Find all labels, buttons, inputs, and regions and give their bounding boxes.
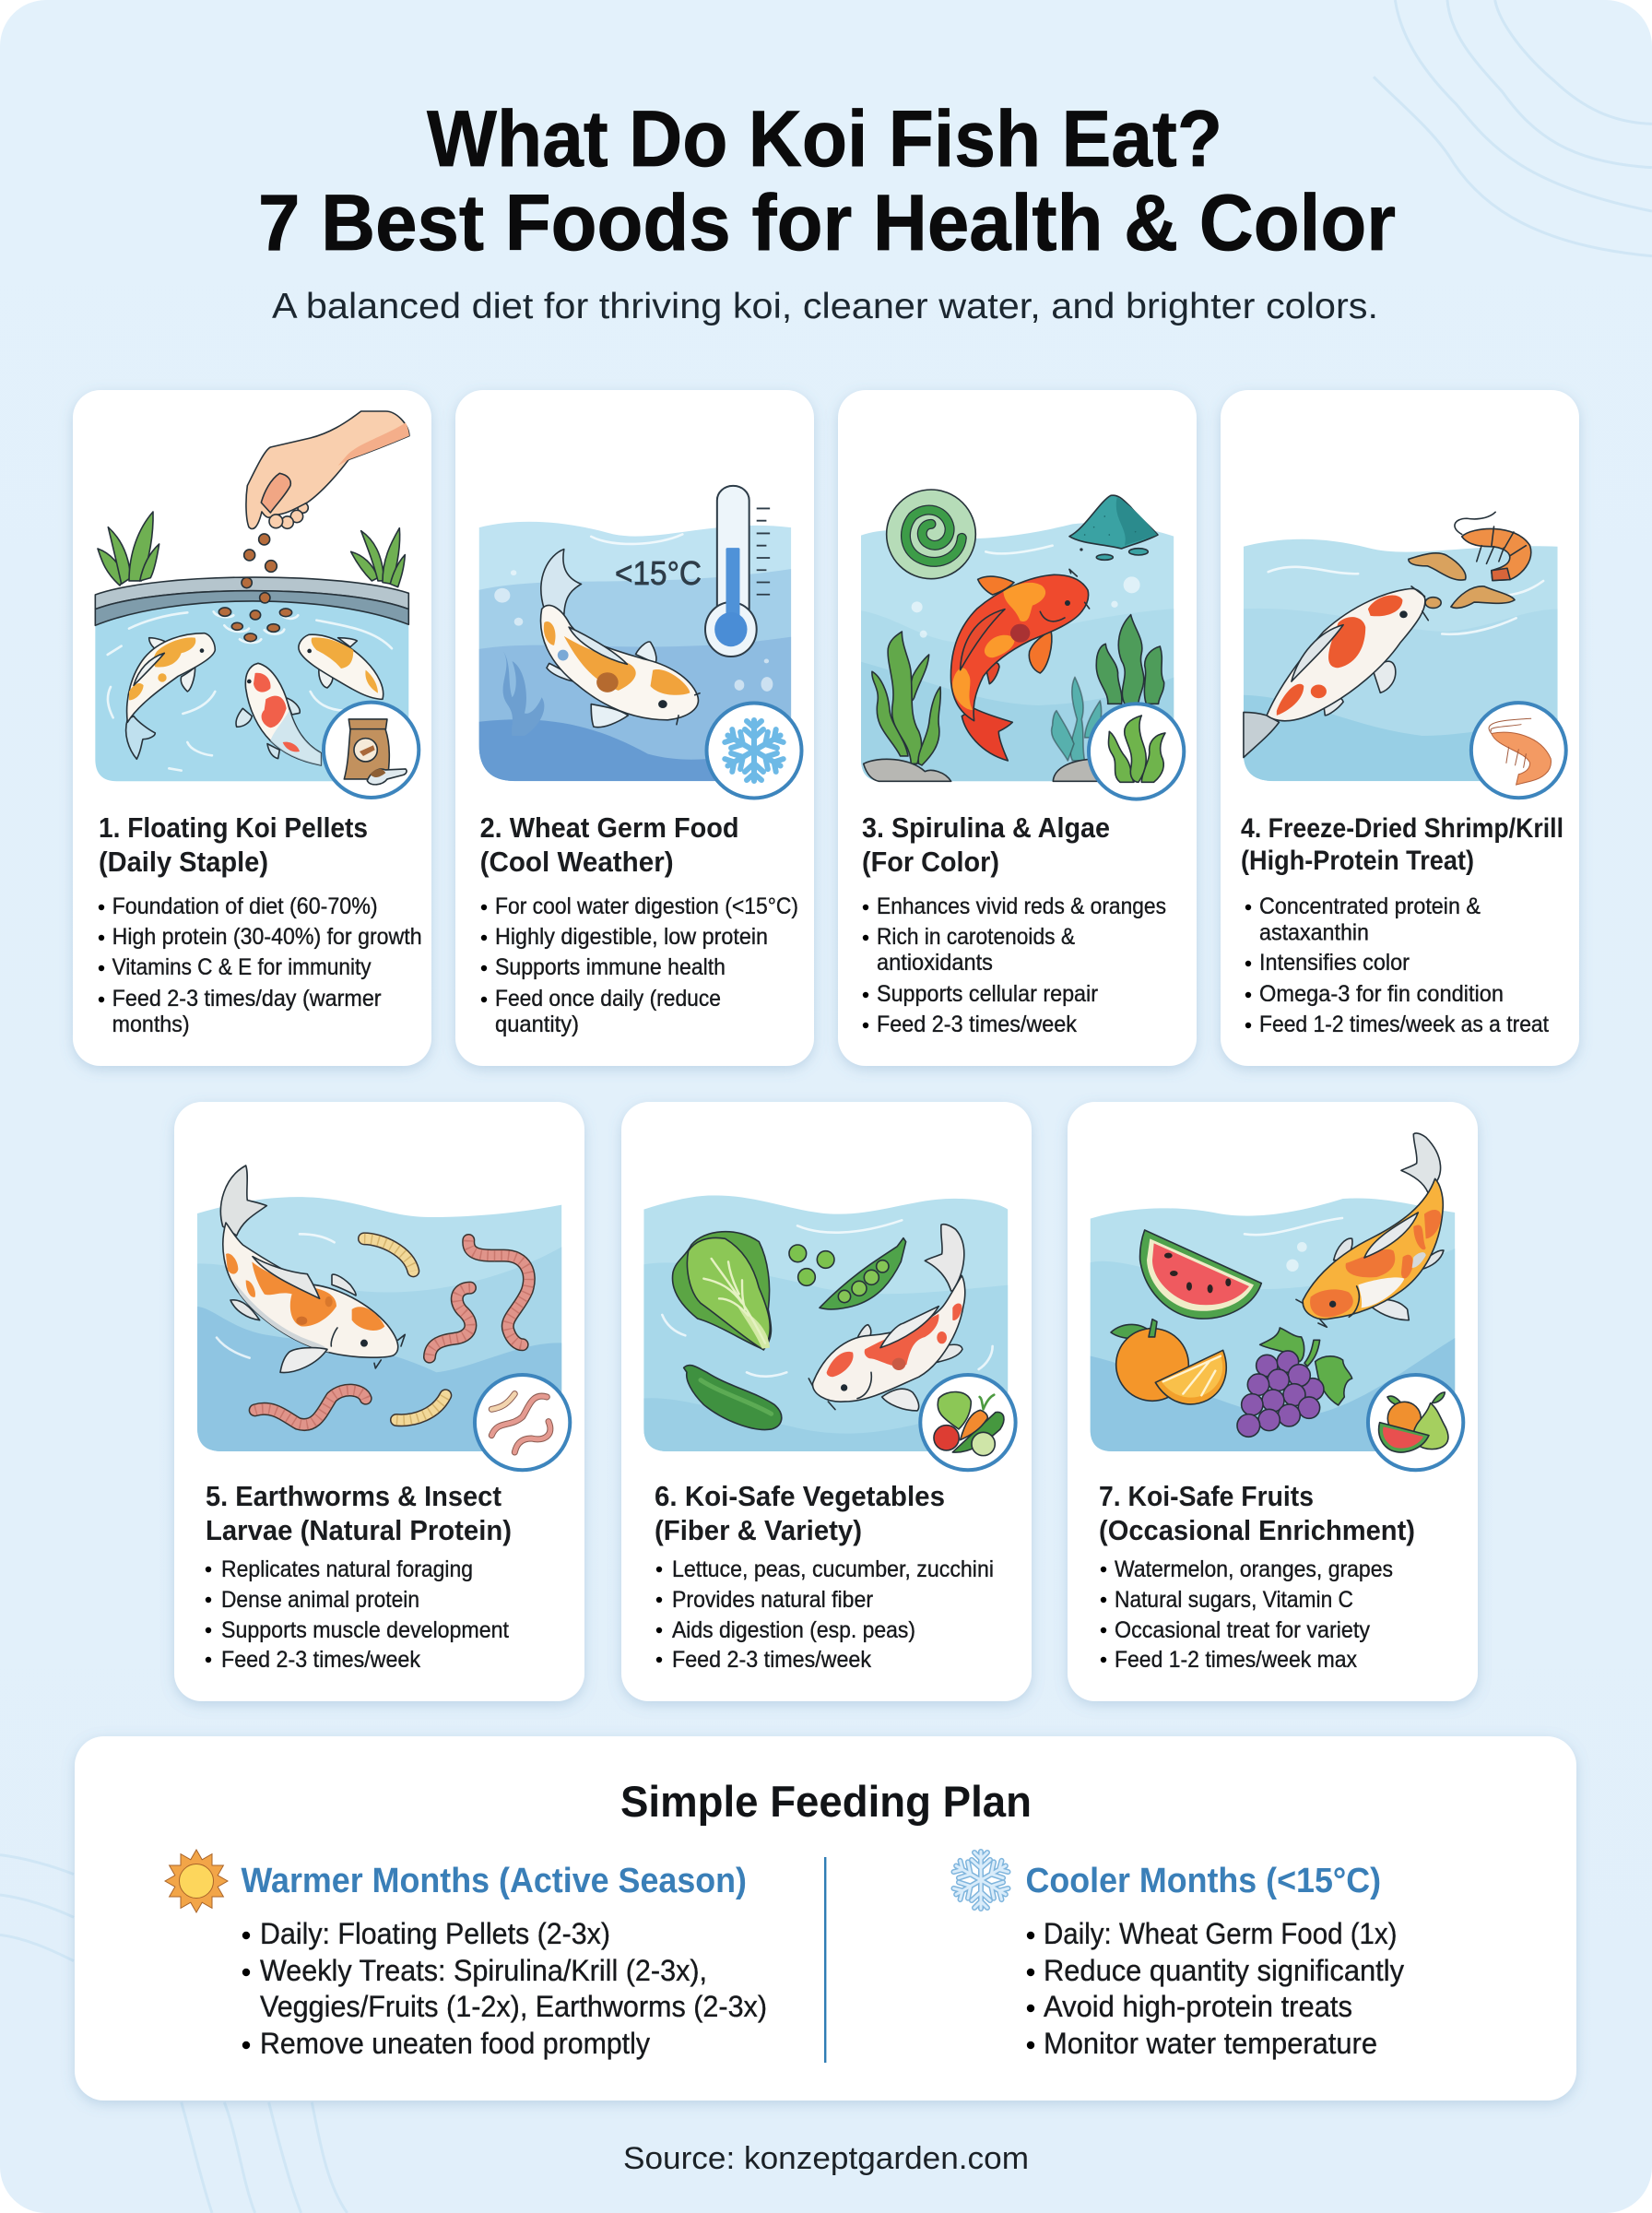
bullet list: Supports muscle development bbox=[221, 1617, 509, 1643]
bullet list: Aids digestion (esp. peas) bbox=[672, 1617, 915, 1643]
illustration: koi with worms and larvae bbox=[194, 1166, 565, 1454]
bullet list bbox=[656, 1556, 994, 1673]
bullet list: months) bbox=[112, 1012, 190, 1037]
panel: card 3 spirulina and algae bbox=[838, 390, 1197, 1066]
cooler months list: Daily: Wheat Germ Food (1x) bbox=[1044, 1917, 1398, 1950]
bullet list: Feed 1-2 times/week max bbox=[1115, 1647, 1357, 1673]
bullet list: Vitamins C & E for immunity bbox=[112, 954, 372, 980]
heading bbox=[206, 1480, 512, 1546]
koi bbox=[1334, 1238, 1352, 1260]
heading: 5. Earthworms & Insect bbox=[206, 1480, 502, 1512]
bullet list: Feed 2-3 times/week bbox=[877, 1012, 1077, 1037]
panel background bbox=[75, 1736, 1576, 2101]
bullet list: For cool water digestion (<15°C) bbox=[495, 893, 798, 919]
heading: 1. Floating Koi Pellets bbox=[99, 811, 368, 844]
panel: card 5 earthworms and insect larvae bbox=[174, 1102, 584, 1701]
krill pieces bbox=[1409, 553, 1515, 608]
divider bbox=[824, 1857, 826, 2063]
worms bbox=[255, 1238, 529, 1425]
card background bbox=[174, 1102, 584, 1701]
lettuce bbox=[672, 1232, 771, 1349]
heading: (High-Protein Treat) bbox=[1241, 846, 1474, 876]
badge: snowflake bbox=[706, 703, 802, 799]
panel: card 6 koi-safe vegetables bbox=[621, 1102, 1032, 1701]
heading: 6. Koi-Safe Vegetables bbox=[655, 1480, 945, 1512]
subtitle: A balanced diet for thriving koi, cleaner water, and brighter colors. bbox=[272, 287, 1378, 326]
bullet list: Provides natural fiber bbox=[672, 1587, 873, 1613]
heading bbox=[99, 811, 368, 878]
title: What Do Koi Fish Eat? bbox=[427, 95, 1222, 183]
illustration: hand feeding pellets to koi in a pond bbox=[95, 411, 409, 781]
bullet list: Lettuce, peas, cucumber, zucchini bbox=[672, 1556, 994, 1582]
warmer months heading: Warmer Months (Active Season) bbox=[242, 1862, 747, 1900]
bullet list: Concentrated protein & bbox=[1259, 893, 1481, 919]
koi centre bbox=[236, 708, 252, 727]
panel: simple feeding plan bbox=[75, 1736, 1576, 2101]
bullet list: Watermelon, oranges, grapes bbox=[1115, 1556, 1393, 1582]
bullet list: Rich in carotenoids & bbox=[877, 924, 1075, 950]
cooler months list bbox=[1027, 1917, 1404, 2060]
bullet list: antioxidants bbox=[877, 950, 993, 976]
badge: worms bbox=[475, 1375, 570, 1470]
panel: card 2 wheat germ food bbox=[455, 390, 814, 1066]
bullet list: Foundation of diet (60-70%) bbox=[112, 893, 378, 919]
heading: (Daily Staple) bbox=[99, 846, 268, 878]
cucumber bbox=[684, 1366, 782, 1429]
badge: shrimp bbox=[1471, 703, 1566, 798]
hand bbox=[246, 411, 409, 529]
bullet list: Supports cellular repair bbox=[877, 981, 1098, 1007]
bullet list: High protein (30-40%) for growth bbox=[112, 924, 422, 950]
cooler months heading: Cooler Months (<15°C) bbox=[1025, 1862, 1381, 1900]
bullet list bbox=[1245, 893, 1549, 1037]
heading bbox=[480, 811, 739, 878]
spirulina powder pile bbox=[1069, 495, 1158, 549]
pea pod bbox=[820, 1238, 906, 1309]
warmer months list: Daily: Floating Pellets (2-3x) bbox=[260, 1917, 610, 1950]
bullet list bbox=[863, 893, 1166, 1037]
bullet list: Feed 2-3 times/day (warmer bbox=[112, 986, 382, 1012]
cooler months list: Reduce quantity significantly bbox=[1044, 1954, 1404, 1987]
bullet list: Feed 2-3 times/week bbox=[221, 1647, 420, 1673]
cooler months list: Avoid high-protein treats bbox=[1044, 1990, 1352, 2023]
spirulina disc bbox=[887, 490, 975, 579]
icon: snowflake bbox=[951, 1852, 1010, 1909]
koi bbox=[230, 1300, 260, 1320]
badge: fruits bbox=[1368, 1375, 1463, 1470]
cooler months list: Monitor water temperature bbox=[1044, 2027, 1377, 2060]
bullet list: Omega-3 for fin condition bbox=[1259, 981, 1504, 1007]
orange bbox=[1111, 1324, 1152, 1338]
badge: pellet bag bbox=[324, 703, 419, 798]
title bbox=[258, 95, 1396, 267]
warmer months list: Veggies/Fruits (1-2x), Earthworms (2-3x) bbox=[260, 1990, 767, 2023]
koi bbox=[855, 1325, 871, 1348]
shrimp bbox=[1462, 528, 1531, 581]
heading bbox=[862, 811, 1110, 878]
red koi bbox=[978, 576, 1014, 595]
grapes bbox=[1237, 1351, 1324, 1437]
heading bbox=[1099, 1480, 1415, 1546]
bullet list bbox=[481, 893, 798, 1037]
heading bbox=[1241, 813, 1564, 876]
heading: 4. Freeze-Dried Shrimp/Krill bbox=[1241, 813, 1564, 844]
card background bbox=[838, 390, 1197, 1066]
card background bbox=[621, 1102, 1032, 1701]
heading: (Cool Weather) bbox=[480, 846, 674, 878]
heading: (For Color) bbox=[862, 846, 999, 878]
heading bbox=[655, 1480, 945, 1546]
warmer months list: Remove uneaten food promptly bbox=[260, 2027, 650, 2060]
card background bbox=[73, 390, 431, 1066]
bullet list: astaxanthin bbox=[1259, 920, 1369, 946]
illustration: koi in cold water with thermometer: <15°C bbox=[615, 554, 702, 592]
bullet list: quantity) bbox=[495, 1012, 579, 1037]
heading: 3. Spirulina & Algae bbox=[862, 811, 1110, 844]
card background bbox=[455, 390, 814, 1066]
illustration: koi with lettuce, peas and cucumber bbox=[643, 1192, 1011, 1454]
warmer months list: Weekly Treats: Spirulina/Krill (2-3x), bbox=[260, 1954, 707, 1987]
bullet list: Intensifies color bbox=[1259, 950, 1410, 976]
badge: vegetables bbox=[920, 1375, 1016, 1470]
bullet list: Dense animal protein bbox=[221, 1587, 419, 1613]
panel: card 7 koi-safe fruits bbox=[1068, 1102, 1478, 1701]
bullet list: Highly digestible, low protein bbox=[495, 924, 768, 950]
koi right bbox=[338, 638, 357, 647]
bullet list bbox=[99, 893, 422, 1037]
panel: card 1 floating koi pellets bbox=[73, 390, 431, 1066]
pellets bbox=[218, 534, 292, 642]
card background bbox=[1221, 390, 1579, 1066]
bullet list: Natural sugars, Vitamin C bbox=[1115, 1587, 1353, 1613]
illustration: red koi with algae bbox=[857, 490, 1177, 784]
title: 7 Best Foods for Health & Color bbox=[258, 179, 1396, 267]
heading: (Fiber & Variety) bbox=[655, 1514, 862, 1546]
illustration: koi with watermelon, orange and grapes bbox=[1088, 1133, 1457, 1454]
badge: algae bbox=[1089, 704, 1184, 799]
bullet list: Occasional treat for variety bbox=[1115, 1617, 1370, 1643]
bullet list: Feed 2-3 times/week bbox=[672, 1647, 871, 1673]
panel: card 4 freeze-dried shrimp and krill bbox=[1221, 390, 1579, 1066]
seaweed bbox=[872, 632, 940, 765]
source line: Source: konzeptgarden.com bbox=[623, 2141, 1029, 2176]
heading: Larvae (Natural Protein) bbox=[206, 1514, 512, 1546]
bullet list: Feed once daily (reduce bbox=[495, 986, 721, 1012]
koi left bbox=[126, 716, 155, 759]
orange slice bbox=[1155, 1350, 1226, 1404]
grape leaves bbox=[1260, 1328, 1352, 1405]
peas bbox=[789, 1245, 834, 1285]
bullet list: Enhances vivid reds & oranges bbox=[877, 893, 1166, 919]
bullet list: Feed 1-2 times/week as a treat bbox=[1259, 1012, 1549, 1037]
bullet list: Supports immune health bbox=[495, 954, 726, 980]
watermelon bbox=[1140, 1230, 1261, 1319]
card background bbox=[1068, 1102, 1478, 1701]
bullet list bbox=[1101, 1556, 1393, 1673]
panel heading: Simple Feeding Plan bbox=[620, 1777, 1032, 1826]
bullet list bbox=[206, 1556, 509, 1673]
warmer months list bbox=[242, 1917, 767, 2060]
icon: sun bbox=[165, 1850, 228, 1912]
illustration: koi eating shrimp and krill bbox=[1240, 512, 1561, 786]
illustration: koi in cold water with thermometer bbox=[475, 486, 796, 786]
heading: 7. Koi-Safe Fruits bbox=[1099, 1480, 1314, 1512]
heading: 2. Wheat Germ Food bbox=[480, 811, 739, 844]
bullet list: Replicates natural foraging bbox=[221, 1556, 473, 1582]
heading: (Occasional Enrichment) bbox=[1099, 1514, 1415, 1546]
